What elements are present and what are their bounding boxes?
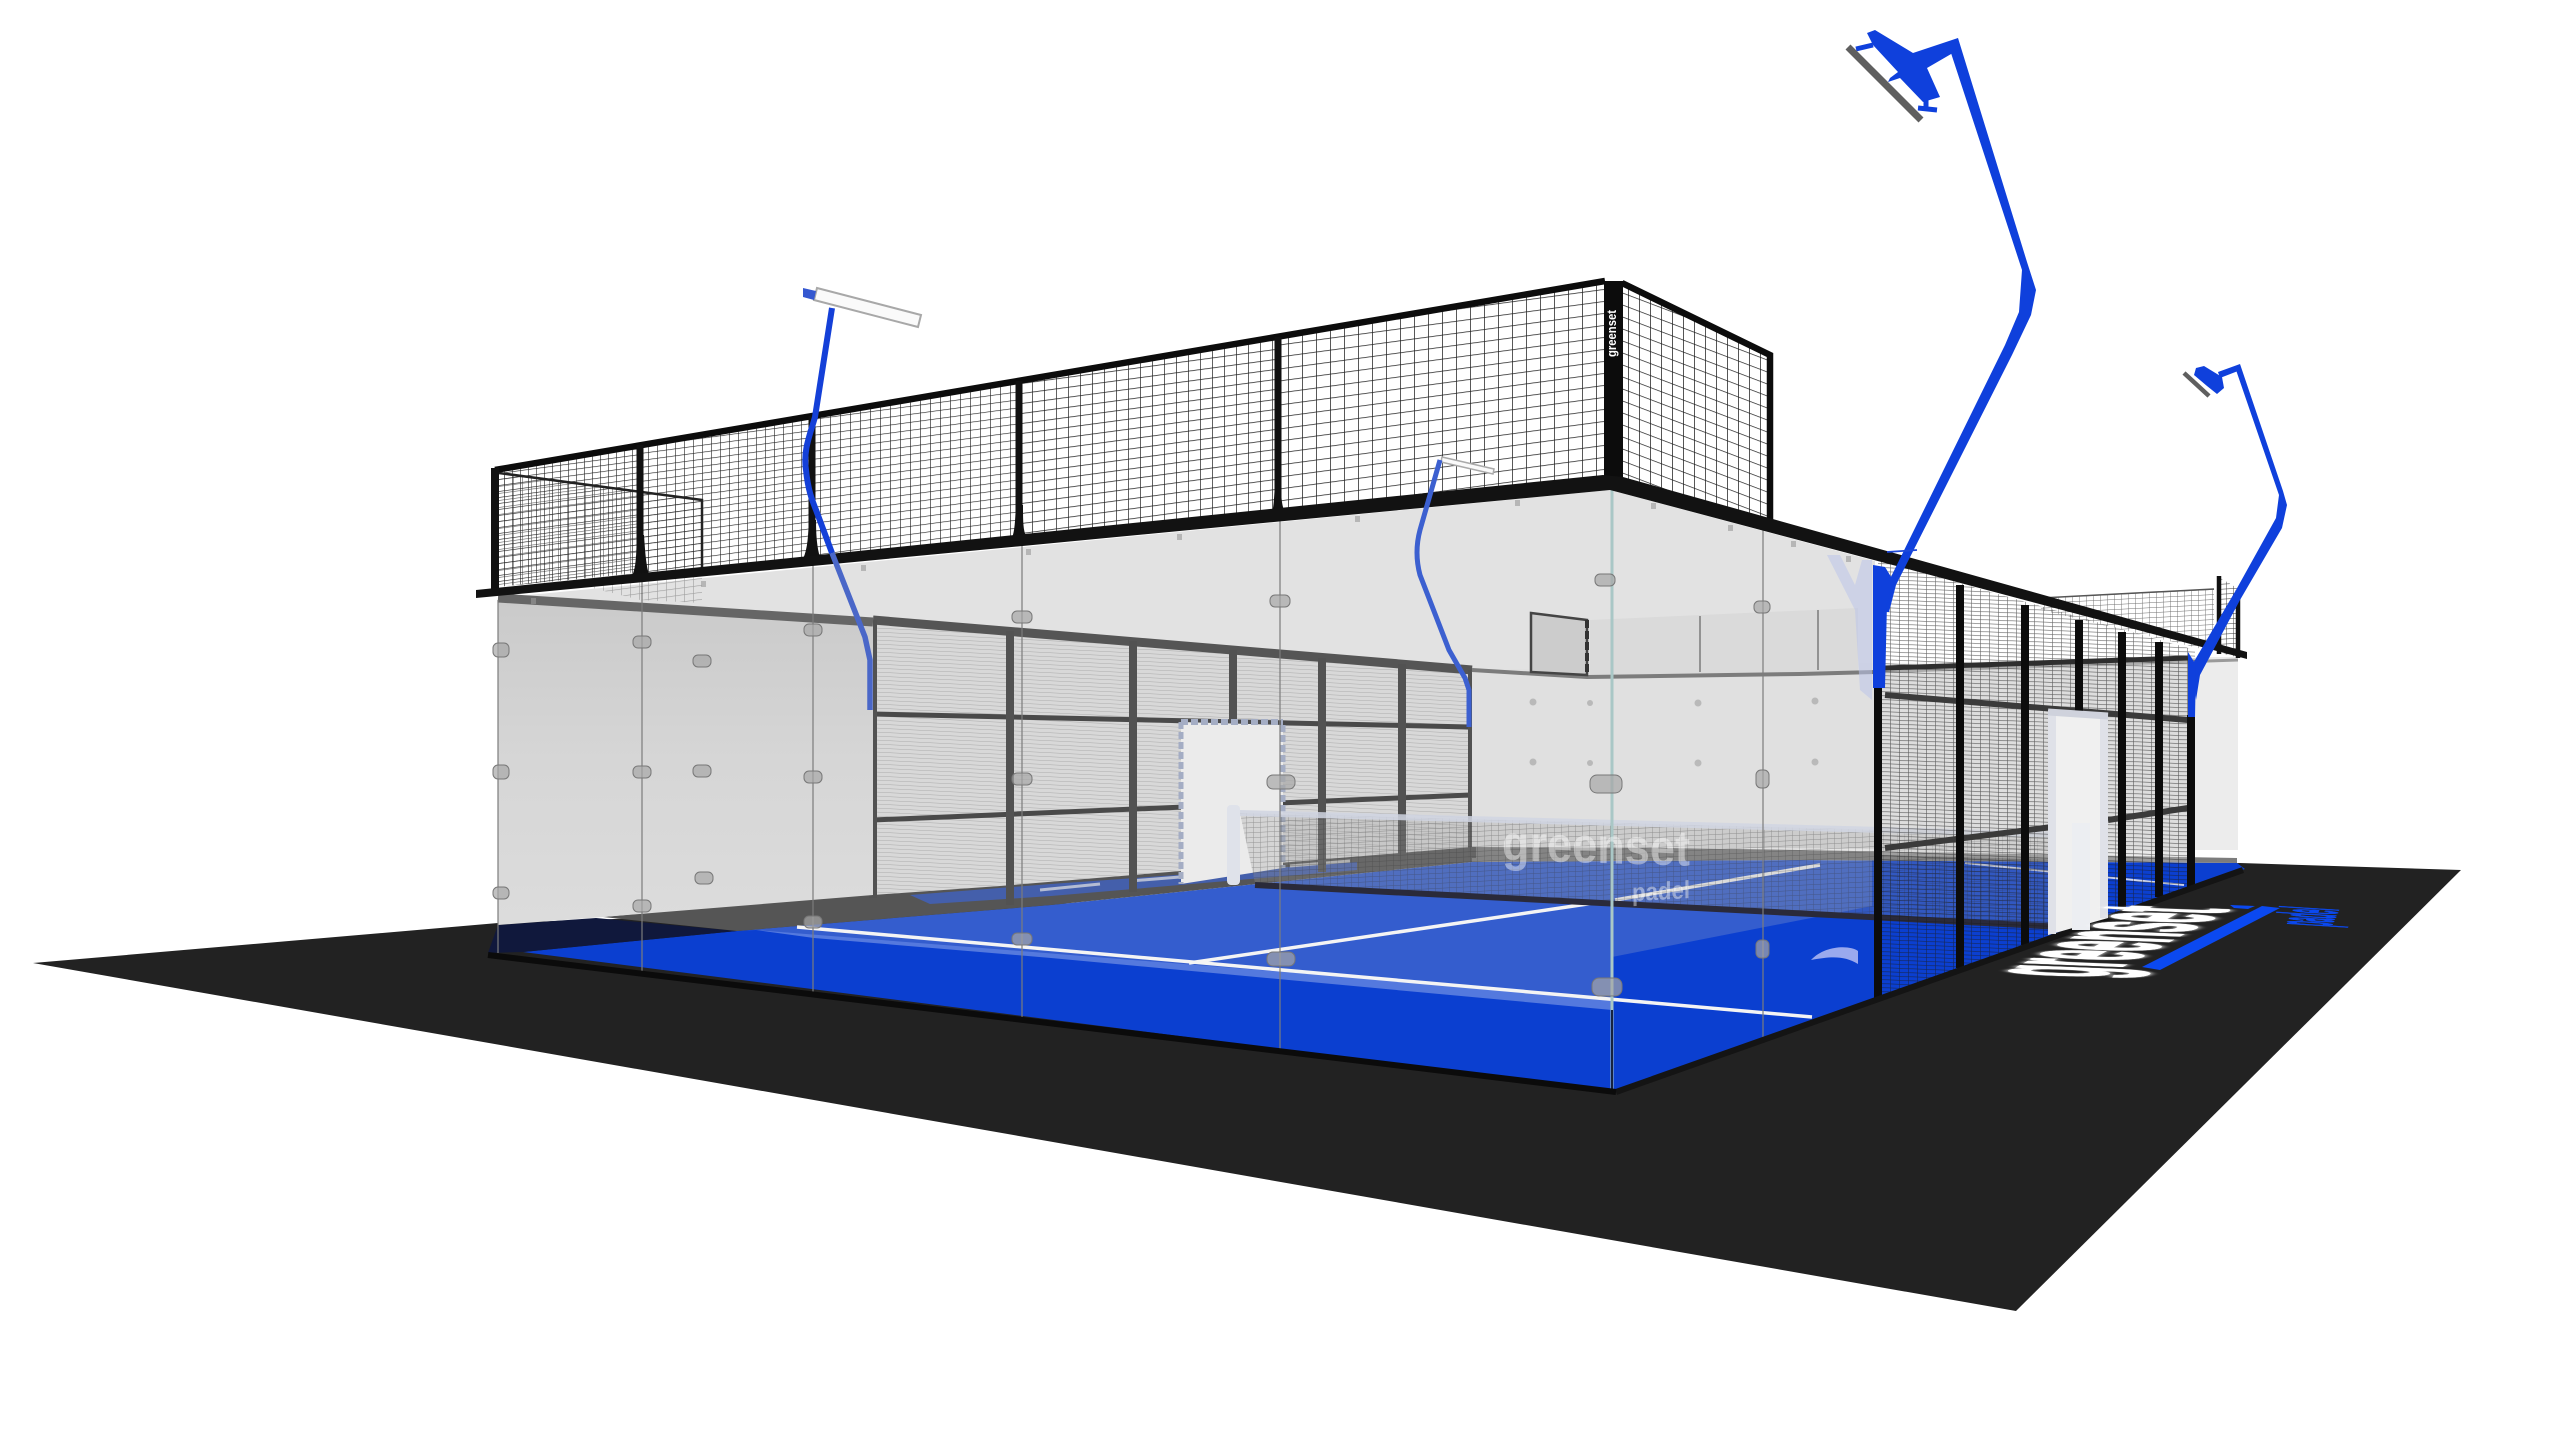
side door	[2048, 710, 2108, 935]
ground logo greenset: greenset	[1938, 903, 2268, 980]
corner post	[1604, 281, 1623, 486]
glass tint over floor	[737, 860, 1872, 998]
glass watermark logo: greenset	[1502, 815, 1690, 877]
shaded floor corner under left glass	[488, 918, 737, 953]
glass watermark logo: padel	[1632, 876, 1690, 907]
top fence near side	[495, 281, 1605, 603]
roof beam clips	[531, 500, 1851, 604]
near right mesh wall	[1616, 560, 2243, 1092]
court floor lines	[797, 863, 2184, 1017]
top fence side return	[1622, 281, 1770, 520]
rail seen through left glass	[498, 598, 873, 622]
roof beam	[476, 475, 2247, 659]
upper band of glass wall	[498, 490, 1875, 677]
floodlight middle	[1417, 457, 1494, 727]
glass panel edges	[498, 488, 1763, 1090]
floor logo mark	[1811, 947, 1858, 964]
far glass wall	[1472, 608, 2238, 850]
pale blue bracket behind glass	[1827, 555, 1872, 700]
blue court floor	[523, 860, 2245, 1092]
ground logo padel: padel	[2258, 905, 2357, 928]
asphalt ground surround	[33, 863, 2461, 1311]
net post left	[1227, 805, 1240, 885]
floodlight small right	[2184, 364, 2287, 717]
glass clamps	[493, 574, 1770, 996]
ground logo blue tick	[2230, 905, 2255, 909]
far end fence	[2041, 576, 2240, 658]
glass watermark logo	[1502, 815, 1690, 907]
post logo: greenset	[1604, 309, 1619, 357]
far wall door opening	[1181, 722, 1283, 884]
ground logo blue bar	[2142, 906, 2280, 970]
dark base strip of the far walls	[603, 845, 2237, 931]
floodlight left	[803, 288, 921, 710]
left end glass wall	[498, 598, 873, 925]
far mesh wall	[873, 620, 1472, 905]
pale band on floor behind the near glass	[756, 930, 1612, 1010]
net	[1240, 813, 2072, 927]
floodlight large right	[1848, 30, 2036, 688]
far glass wall fixings	[1530, 698, 1818, 766]
floor front edge	[488, 955, 1616, 1092]
